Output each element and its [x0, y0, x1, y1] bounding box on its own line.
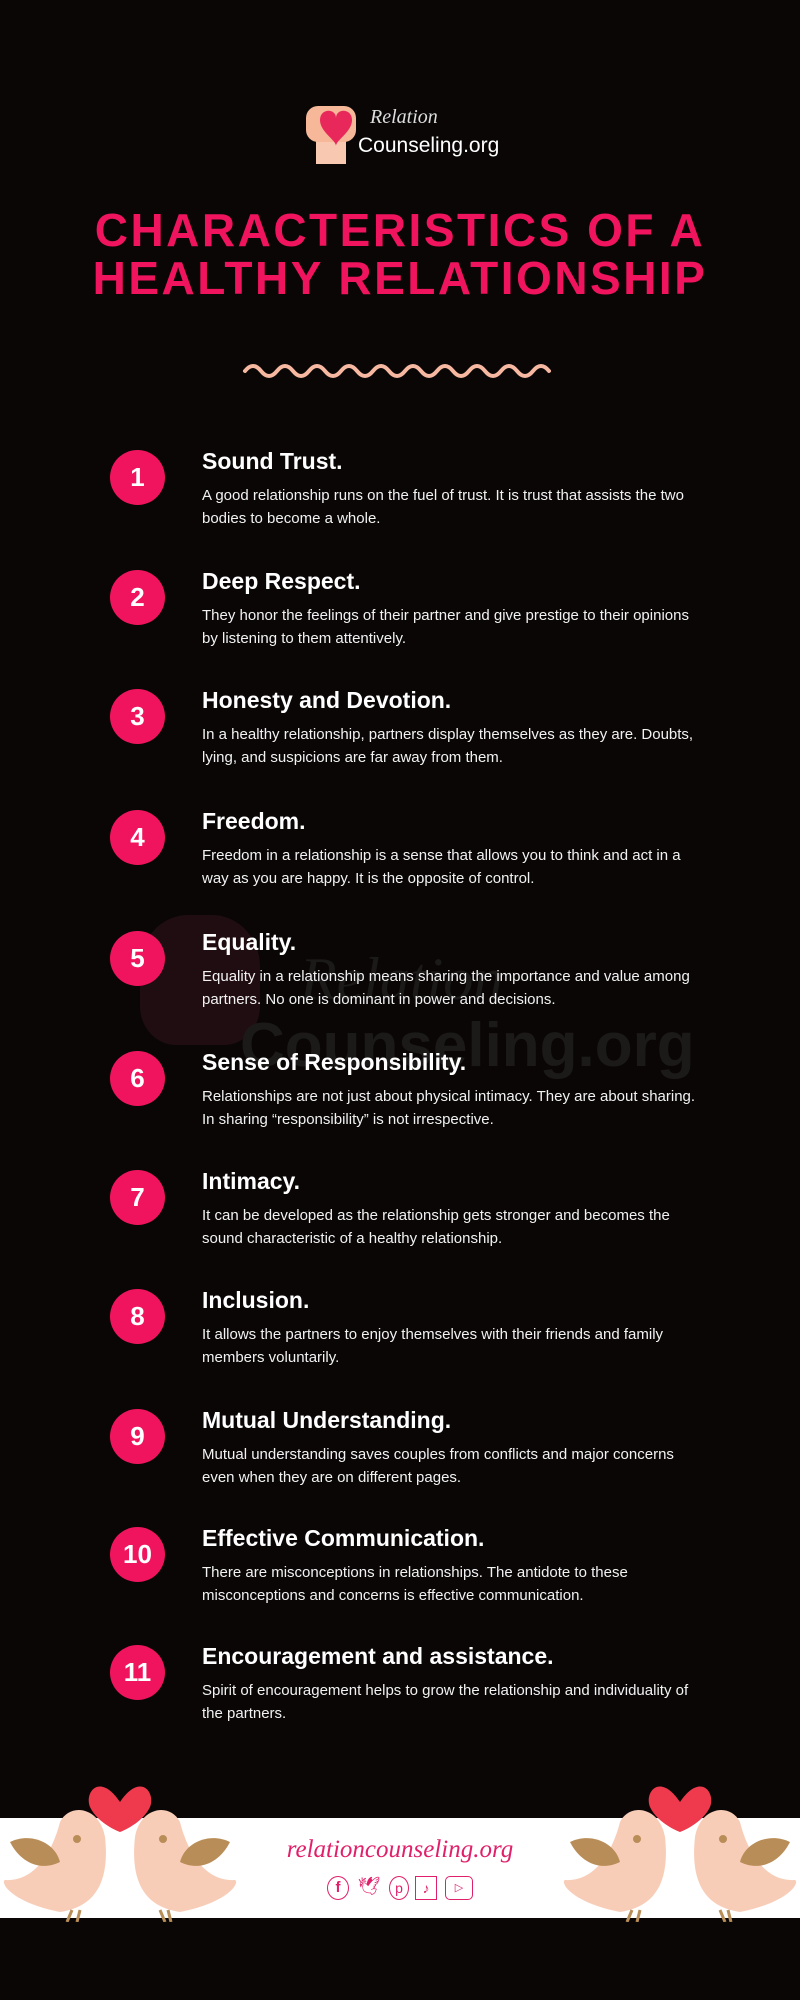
item 2: They honor the feelings of their partner and give prestige to their opinions by listening to them attentively.: [202, 607, 689, 647]
title: HEALTHY RELATIONSHIP: [93, 252, 707, 304]
item 3: 3: [130, 701, 145, 731]
birds right: [564, 1786, 796, 1922]
wave divider: [242, 364, 552, 378]
item 9: [110, 1407, 674, 1486]
item 9: 9: [130, 1421, 145, 1451]
item 6: Relationships are not just about physical intimacy. They are about sharing. In sharing “responsibility” is not irrespective.: [202, 1088, 695, 1128]
item 8: [110, 1287, 663, 1366]
item 5: 5: [130, 943, 145, 973]
item 7: [110, 1168, 670, 1247]
item 11: Spirit of encouragement helps to grow the relationship and individuality of the partners.: [202, 1682, 688, 1722]
item 3: Honesty and Devotion.: [202, 687, 451, 713]
item 1: A good relationship runs on the fuel of trust. It is trust that assists the two bodies to become a whole.: [202, 487, 684, 527]
logo: Relation: [370, 106, 438, 128]
item 2: 2: [130, 582, 145, 612]
item 4: Freedom in a relationship is a sense that allows you to think and act in a way as you are happy. It is the opposite of control.: [202, 847, 681, 887]
watermark: Counseling.org: [240, 1011, 695, 1080]
footer url: relationcounseling.org: [287, 1836, 513, 1863]
logo: [306, 106, 499, 164]
item 4: Freedom.: [202, 808, 306, 834]
item 2: [110, 568, 689, 647]
item 11: Encouragement and assistance.: [202, 1643, 554, 1669]
item 4: [110, 808, 681, 887]
item 7: Intimacy.: [202, 1168, 300, 1194]
item 10: 10: [123, 1539, 152, 1569]
item 5: Equality.: [202, 929, 296, 955]
item 6: Sense of Responsibility.: [202, 1049, 466, 1075]
item 8: 8: [130, 1301, 145, 1331]
item 9: Mutual Understanding.: [202, 1407, 451, 1433]
item 10: Effective Communication.: [202, 1525, 484, 1551]
item 3: [110, 687, 693, 766]
social icons: ♪: [422, 1880, 430, 1896]
item 10: [110, 1525, 628, 1604]
item 7: It can be developed as the relationship gets stronger and becomes the sound characteristic of a healthy relationship.: [202, 1207, 670, 1247]
birds left: [4, 1786, 236, 1922]
item 4: 4: [130, 822, 145, 852]
title: CHARACTERISTICS OF A: [95, 204, 705, 256]
watermark: Relation: [300, 946, 503, 1012]
item 8: It allows the partners to enjoy themselves with their friends and family members voluntarily.: [202, 1326, 663, 1366]
social icons: f: [336, 1879, 340, 1896]
item 11: 11: [124, 1657, 151, 1687]
social icons: ▷: [455, 1882, 463, 1894]
item 1: Sound Trust.: [202, 448, 343, 474]
item 8: Inclusion.: [202, 1287, 309, 1313]
item 10: There are misconceptions in relationships. The antidote to these misconceptions and concerns is effective communication.: [202, 1564, 628, 1604]
item 5: [110, 929, 690, 1008]
item 1: [110, 448, 684, 527]
item 1: 1: [130, 462, 145, 492]
item 9: Mutual understanding saves couples from conflicts and major concerns even when they are on different pages.: [202, 1446, 674, 1486]
social icons: p: [395, 1880, 403, 1896]
icon: fist heart: [306, 106, 356, 164]
item 3: In a healthy relationship, partners display themselves as they are. Doubts, lying, and suspicions are far away from them.: [202, 726, 693, 766]
item 7: 7: [130, 1182, 145, 1212]
title: [93, 204, 707, 304]
item 6: [110, 1049, 695, 1128]
footer band: [0, 1818, 800, 1918]
item 11: [110, 1643, 688, 1722]
logo: Counseling.org: [358, 134, 499, 157]
watermark: [140, 915, 695, 1080]
item 5: Equality in a relationship means sharing the importance and value among partners. No one is dominant in power and decisions.: [202, 968, 690, 1008]
social icons: 🕊︎: [358, 1876, 380, 1896]
social icons: [327, 1876, 473, 1900]
item 6: 6: [130, 1063, 145, 1093]
item 2: Deep Respect.: [202, 568, 361, 594]
